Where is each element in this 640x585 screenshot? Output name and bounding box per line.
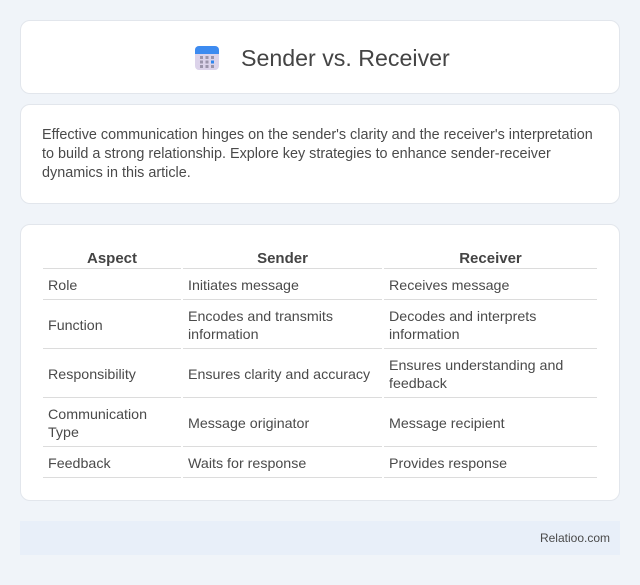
panel: introduction bbox=[20, 104, 620, 204]
row: Responsibility bbox=[48, 358, 563, 392]
row: Communication Type: Message recipient bbox=[389, 416, 505, 432]
row: Function: information bbox=[188, 327, 258, 343]
icon: calendar bbox=[195, 46, 219, 70]
text block: introduction: dynamics in this article. bbox=[42, 165, 191, 181]
column heading: Aspect: Aspect bbox=[87, 250, 137, 267]
row: Feedback bbox=[48, 456, 507, 472]
row: Function: Function bbox=[48, 318, 103, 334]
row: Communication Type: Type bbox=[48, 425, 79, 441]
row: Function: Encodes and transmits bbox=[188, 309, 333, 325]
row: Feedback: Provides response bbox=[389, 456, 507, 472]
text block: introduction bbox=[42, 126, 593, 181]
row: Function: Decodes and interprets bbox=[389, 309, 536, 325]
row: Function bbox=[48, 309, 536, 343]
text block: introduction: Effective communication hinges on the sender's clarity and the receiver's interpretation bbox=[42, 126, 593, 142]
row: Role: Initiates message bbox=[188, 278, 299, 294]
row: Communication Type: Message originator bbox=[188, 416, 309, 432]
footer bar bbox=[20, 521, 620, 555]
panel: comparison table bbox=[20, 224, 620, 501]
text block: introduction: to build a strong relationship. Explore key strategies to enhance sender-receiver bbox=[42, 146, 551, 162]
row: Role: Role bbox=[48, 278, 77, 294]
footer text: Relatioo.com bbox=[540, 531, 610, 545]
row: Responsibility: Ensures understanding and bbox=[389, 358, 563, 374]
row: Communication Type bbox=[48, 407, 505, 441]
panel: title card bbox=[20, 20, 620, 94]
row: Feedback: Waits for response bbox=[188, 456, 306, 472]
title: Sender vs. Receiver bbox=[241, 45, 450, 71]
row: Feedback: Feedback bbox=[48, 456, 111, 472]
row: Responsibility: Ensures clarity and accuracy bbox=[188, 367, 370, 383]
row: Responsibility: Responsibility bbox=[48, 367, 136, 383]
column heading: Receiver: Receiver bbox=[459, 250, 522, 267]
row: Role bbox=[48, 278, 509, 294]
row: Communication Type: Communication bbox=[48, 407, 147, 423]
column heading: Sender: Sender bbox=[257, 250, 308, 267]
row: Role: Receives message bbox=[389, 278, 509, 294]
row: Responsibility: feedback bbox=[389, 376, 447, 392]
row: Function: information bbox=[389, 327, 460, 343]
